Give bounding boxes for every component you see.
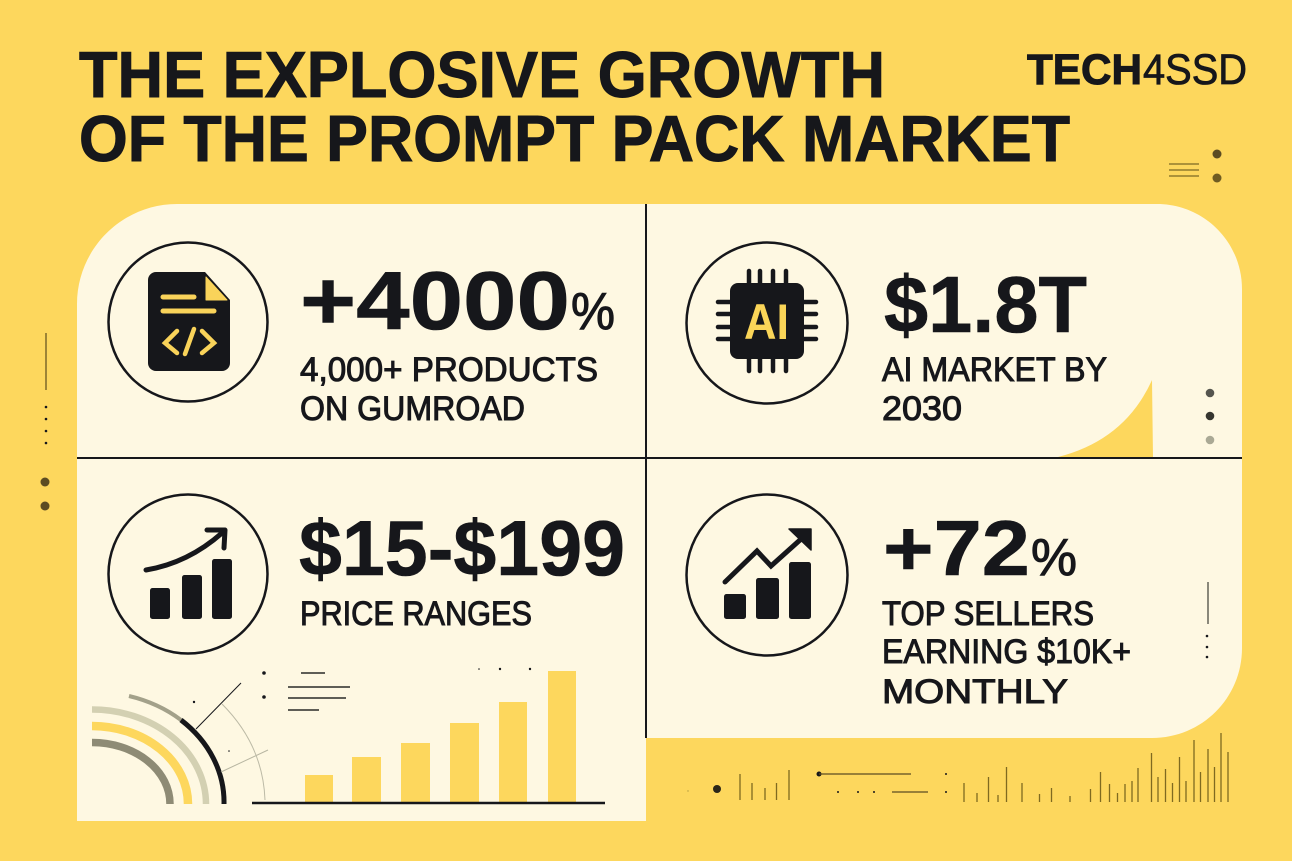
decoration: top right lines and dots xyxy=(1169,150,1222,182)
logo: TECH4SSD: 4SSD xyxy=(1143,46,1247,94)
divider: horizontal xyxy=(77,457,1242,459)
panel: top sellers xyxy=(686,494,1208,711)
stat: +72%: % xyxy=(1031,529,1077,587)
stat: $15-$199: $15-$199 xyxy=(299,504,625,592)
decoration: three dots xyxy=(1206,389,1214,444)
panel: 4000 percent products xyxy=(108,242,615,428)
chart: small yellow growth curve xyxy=(1058,380,1153,457)
title: OF THE PROMPT PACK MARKET xyxy=(79,102,1070,175)
panel: AI market xyxy=(686,242,1214,444)
icon: bars with curved arrow xyxy=(108,494,268,654)
icon: AI chip: AI xyxy=(744,294,789,350)
label: AI market by 2030: 2030 xyxy=(882,390,962,428)
label: top sellers earning xyxy=(882,595,1131,711)
stat: +72% xyxy=(883,504,1077,592)
title xyxy=(79,38,1070,175)
label: top sellers earning: TOP SELLERS xyxy=(882,595,1094,633)
label: products on Gumroad: 4,000+ PRODUCTS xyxy=(300,351,598,389)
decoration: bottom sparkline ticks xyxy=(687,733,1228,802)
logo: TECH4SSD: TECH xyxy=(1027,46,1142,94)
label: price ranges: PRICE RANGES xyxy=(300,595,532,633)
label: AI market by 2030: AI MARKET BY xyxy=(882,351,1107,389)
decoration: legend lines and dots xyxy=(262,668,531,710)
icon: code document xyxy=(108,242,268,402)
label: top sellers earning: EARNING $10K+ xyxy=(882,633,1131,671)
icon: bars with zigzag arrow xyxy=(686,494,848,656)
chart: concentric arcs xyxy=(92,683,268,804)
stat: +4000%: % xyxy=(571,283,615,341)
panel: price ranges xyxy=(108,494,625,654)
icon: AI chip xyxy=(686,242,848,404)
title: THE EXPLOSIVE GROWTH xyxy=(79,38,885,111)
label: products on Gumroad: ON GUMROAD xyxy=(300,390,525,428)
stat: +72%: +72 xyxy=(883,504,1030,592)
decoration: left line and dots xyxy=(40,333,50,510)
panel: cream background xyxy=(77,204,1242,821)
stat: +4000%: +4000 xyxy=(300,254,570,347)
logo: TECH4SSD xyxy=(1027,46,1247,94)
label: AI market by 2030 xyxy=(882,351,1107,428)
decoration: line and dots xyxy=(1206,582,1208,658)
label: products on Gumroad xyxy=(300,351,598,428)
label: top sellers earning: MONTHLY xyxy=(882,673,1068,711)
divider: vertical xyxy=(645,204,647,738)
chart: rising yellow bars xyxy=(252,671,605,803)
stat: $1.8T: $1.8T xyxy=(884,260,1087,349)
